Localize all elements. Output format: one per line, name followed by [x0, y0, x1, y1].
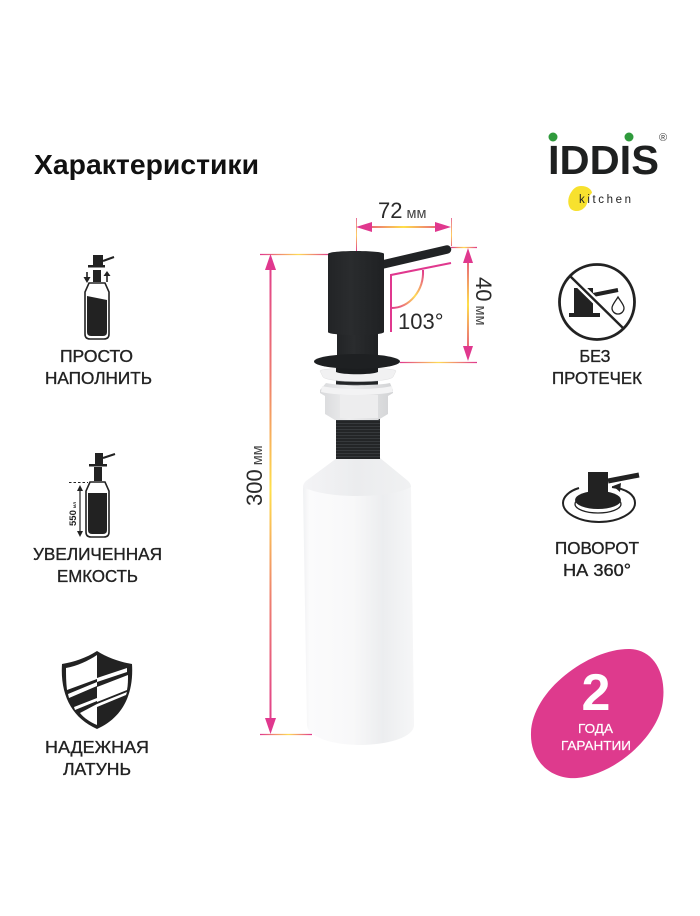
feature: increased capacity: ЕМКОСТЬ — [57, 566, 138, 586]
dimension: 40 mm height — [400, 248, 496, 362]
icon: crossed faucet and drop — [560, 264, 634, 340]
feature: 360 rotation — [555, 472, 639, 580]
dimension: 72 mm width: 72 мм — [378, 198, 426, 223]
logo: IDDIS kitchen: kitchen — [579, 194, 631, 206]
feature: 360 rotation: НА 360° — [563, 560, 631, 580]
label: ПРОСТО — [60, 346, 133, 366]
lever — [376, 250, 447, 266]
body — [328, 251, 384, 335]
icon: bottle 550 ml: 550мл — [68, 502, 79, 526]
label: НАДЕЖНАЯ — [45, 737, 149, 757]
threaded tube — [336, 418, 380, 459]
icon: swivel — [563, 472, 639, 522]
plastic nut — [320, 383, 393, 420]
dimension: 103 degree angle — [391, 263, 451, 334]
dimension: 300 mm height: 300мм — [242, 445, 267, 506]
feature: no leaks — [552, 264, 643, 388]
dimension: 72 mm width — [356, 198, 452, 252]
feature: increased capacity — [33, 453, 162, 586]
badge: 2 years warranty — [531, 649, 663, 778]
feature: easy to fill: НАПОЛНИТЬ — [45, 368, 152, 388]
feature: reliable brass: ЛАТУНЬ — [63, 759, 131, 779]
title: Характеристики — [34, 149, 259, 180]
feature: no leaks: ПРОТЕЧЕК — [552, 368, 643, 388]
white washer — [320, 368, 396, 382]
neck — [337, 332, 378, 360]
feature: reliable brass — [45, 651, 149, 779]
flange — [336, 368, 378, 374]
label: УВЕЛИЧЕННАЯ — [33, 544, 162, 564]
dimension: 300 mm height — [242, 254, 330, 734]
product: dispenser — [303, 250, 447, 745]
logo: IDDIS kitchen: IDDIS — [548, 137, 659, 183]
label: БЕЗ — [580, 346, 610, 366]
icon: bottle with refill arrows — [84, 255, 114, 339]
label: ПОВОРОТ — [555, 538, 639, 558]
icon: shield — [62, 651, 132, 729]
feature: easy to fill — [45, 255, 152, 388]
dimension: 40 mm height: 40 мм — [471, 277, 496, 325]
dimension: 103 degree angle: 103° — [398, 309, 444, 334]
logo: IDDIS kitchen — [548, 132, 667, 211]
badge: 2 years warranty: ГОДА — [578, 721, 613, 736]
bottle — [303, 458, 414, 745]
badge: 2 years warranty: 2 — [582, 664, 610, 722]
badge: 2 years warranty: ГАРАНТИИ — [561, 738, 631, 753]
logo: IDDIS kitchen: ® — [659, 132, 667, 144]
